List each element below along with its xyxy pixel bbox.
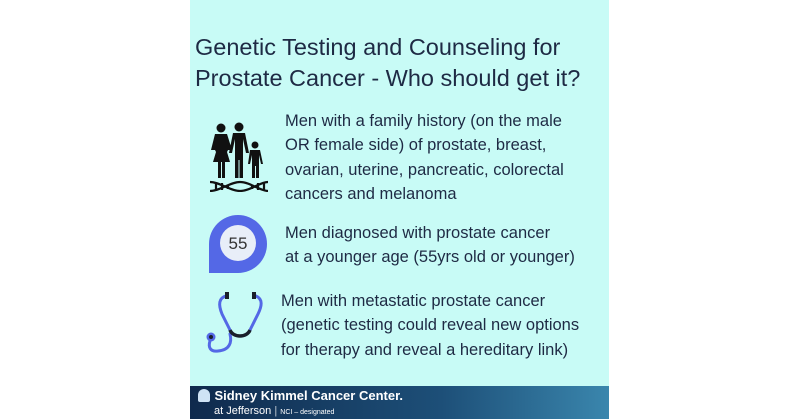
logo text xyxy=(198,388,403,417)
title xyxy=(195,34,580,91)
text: family history xyxy=(285,112,564,203)
text: metastatic: Men with metastatic prostate cancer xyxy=(281,292,545,310)
text: family history: OR female side) of prostate, breast, xyxy=(285,136,546,154)
text: younger age xyxy=(285,224,575,266)
icon: age 55 pin xyxy=(209,215,267,273)
icon: age 55 pin: 55 xyxy=(229,234,247,253)
text: younger age: at a younger age (55yrs old or younger) xyxy=(285,248,575,266)
icon: family with DNA xyxy=(210,122,268,192)
panel: main xyxy=(190,0,609,419)
text: younger age: Men diagnosed with prostate cancer xyxy=(285,224,550,242)
footer logo bar xyxy=(190,386,609,419)
text: metastatic xyxy=(281,292,579,359)
text: metastatic: for therapy and reveal a hereditary link) xyxy=(281,341,568,359)
text: family history: ovarian, uterine, pancreatic, colorectal xyxy=(285,161,564,179)
text: family history: cancers and melanoma xyxy=(285,185,457,203)
icon: stethoscope xyxy=(206,292,263,353)
logo text: at Jefferson | NCI – designated xyxy=(214,405,334,417)
logo text: Sidney Kimmel Cancer Center. xyxy=(214,388,403,403)
title: Prostate Cancer - Who should get it? xyxy=(195,65,580,91)
text: family history: Men with a family history (on the male xyxy=(285,112,562,130)
text: metastatic: (genetic testing could reveal new options xyxy=(281,316,579,334)
title: Genetic Testing and Counseling for xyxy=(195,34,560,60)
